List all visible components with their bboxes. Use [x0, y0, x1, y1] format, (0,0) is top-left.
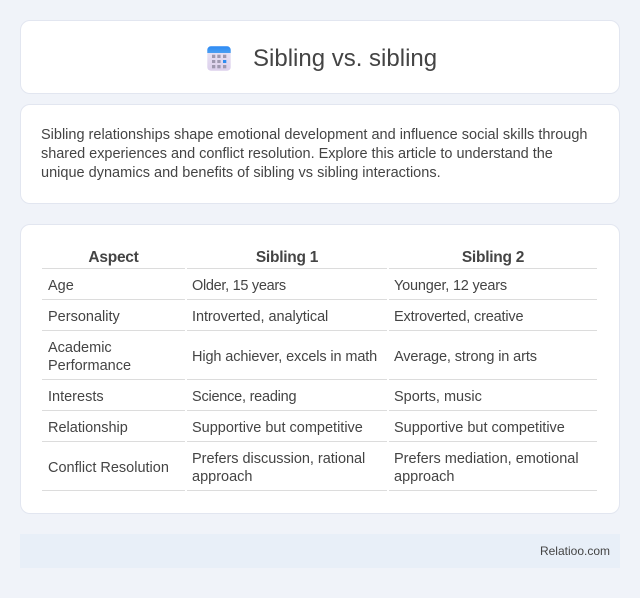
column heading: Sibling 2: Sibling 2: [462, 249, 524, 266]
row: Personality: [48, 309, 523, 325]
comparison table: Extroverted, creative: [394, 309, 523, 325]
comparison table: Younger, 12 years: [394, 278, 507, 294]
intro text: [41, 127, 588, 181]
comparison table: Interests: [48, 389, 104, 405]
comparison table: Older, 15 years: [192, 278, 286, 294]
comparison table: Average, strong in arts: [394, 349, 537, 365]
icon: calendar: [207, 46, 231, 71]
comparison table: Prefers mediation, emotional: [394, 451, 579, 467]
comparison table: Relationship: [48, 420, 128, 436]
comparison table: approach: [394, 469, 454, 485]
column heading: Sibling 1: Sibling 1: [256, 249, 318, 266]
comparison table: Supportive but competitive: [394, 420, 565, 436]
intro text: Sibling relationships shape emotional development and influence social skills through: [41, 127, 588, 143]
row: Age: [48, 278, 507, 294]
panel: introduction: [20, 104, 620, 204]
comparison table: Introverted, analytical: [192, 309, 328, 325]
comparison table: Supportive but competitive: [192, 420, 363, 436]
comparison table: High achiever, excels in math: [192, 349, 377, 365]
comparison table: Prefers discussion, rational: [192, 451, 365, 467]
row: Academic Performance: [48, 340, 537, 374]
comparison table: Academic: [48, 340, 112, 356]
footer bar: [20, 534, 620, 568]
comparison table: approach: [192, 469, 252, 485]
intro text: shared experiences and conflict resolution. Explore this article to understand the: [41, 146, 553, 162]
row: Interests: [48, 389, 482, 405]
panel: comparison table: [20, 224, 620, 514]
title: Sibling vs. sibling: [253, 45, 437, 72]
footer credit: Relatioo.com: [540, 544, 610, 558]
comparison table: Sports, music: [394, 389, 482, 405]
comparison table: Personality: [48, 309, 120, 325]
column heading: Aspect: Aspect: [88, 249, 139, 266]
panel: title card: [20, 20, 620, 94]
comparison table: Performance: [48, 358, 131, 374]
comparison table: Science, reading: [192, 389, 296, 405]
row: Conflict Resolution: [48, 451, 579, 485]
comparison table: Conflict Resolution: [48, 460, 169, 476]
intro text: unique dynamics and benefits of sibling vs sibling interactions.: [41, 165, 441, 181]
comparison table: Age: [48, 278, 74, 294]
row: Relationship: [48, 420, 565, 436]
